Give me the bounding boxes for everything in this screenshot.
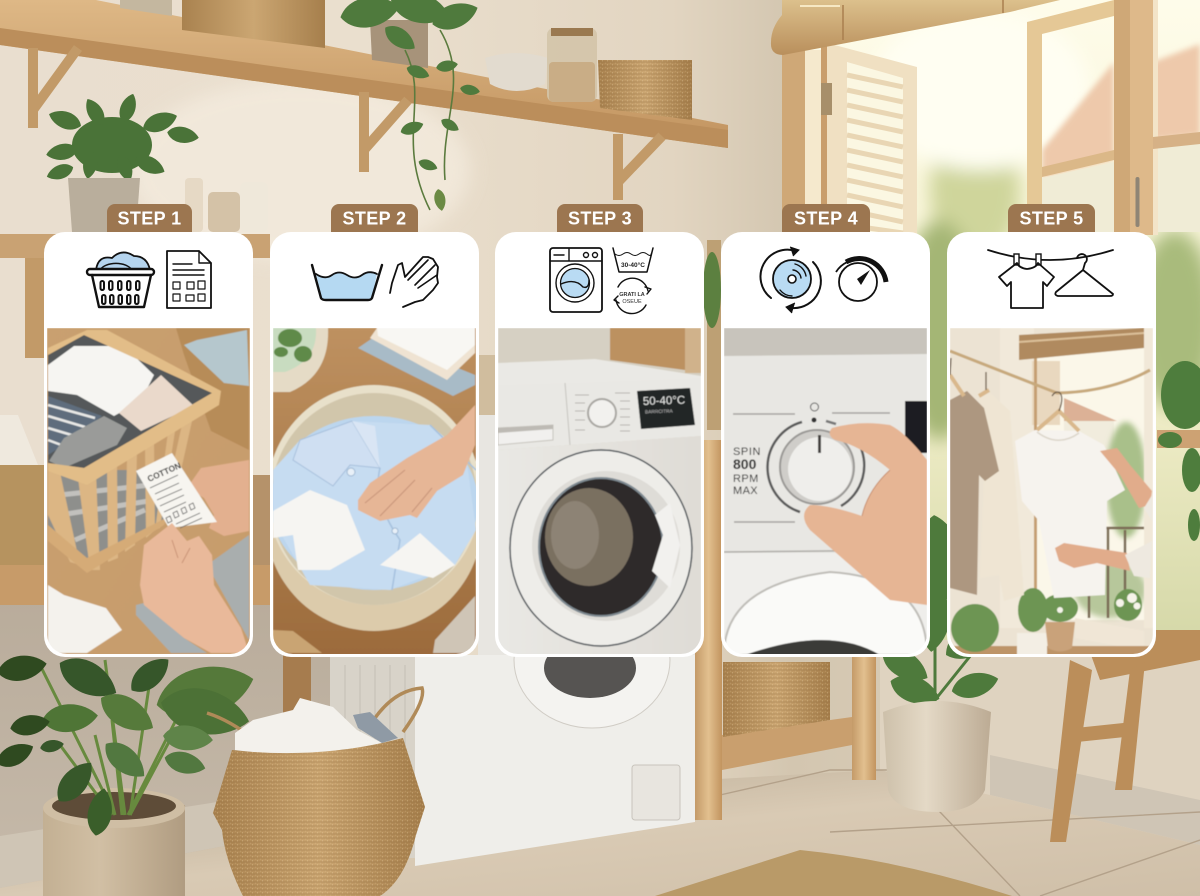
hand behind tag [187, 460, 249, 536]
photo: sorting clothes [47, 328, 250, 655]
pot on shelf [370, 20, 428, 68]
step 4 tab [782, 204, 870, 232]
terracotta-beige pot [43, 788, 185, 896]
brackets [33, 48, 662, 200]
card 2 [270, 232, 479, 657]
towels bottom [48, 585, 122, 653]
wicker basket floor [207, 688, 425, 896]
icon: clothesline shirt [988, 250, 1113, 308]
care tag: COTTON [146, 460, 182, 484]
display: BARRCITRA [645, 409, 674, 415]
hands [1100, 448, 1152, 508]
spin label [733, 446, 761, 497]
hangers [950, 375, 1079, 431]
top shelf [0, 0, 728, 200]
icon: wash basin [312, 265, 382, 300]
blind [1019, 328, 1144, 360]
control panel [498, 400, 701, 450]
basin [273, 526, 476, 632]
plants [951, 588, 1142, 652]
icon: temperature tub: 30-40°C [621, 261, 645, 269]
floor [0, 770, 1200, 896]
step 3 tab [557, 204, 643, 232]
hanging clothes [979, 393, 1024, 601]
detergent drawer [498, 425, 553, 445]
laundry in basket [235, 698, 382, 755]
card 4 [721, 232, 930, 657]
bowl on shelf [485, 53, 548, 91]
icon: cycle arrows: GRATI LA [619, 292, 645, 298]
photo: drying line [950, 328, 1153, 655]
window [805, 0, 1200, 640]
window view [1034, 348, 1144, 620]
display [637, 388, 695, 429]
icon: speed gauge [836, 259, 886, 301]
step 2 tab [331, 204, 418, 232]
plant in white pot right [876, 513, 1005, 812]
icon: cycle arrows: OSEUE [622, 299, 642, 305]
dial [768, 422, 864, 512]
front hand [140, 523, 249, 653]
icon: hand [390, 257, 438, 307]
machine top [498, 358, 701, 386]
folded towels [358, 335, 475, 396]
washing machine in room [283, 355, 700, 866]
open sash frame [1027, 0, 1200, 235]
white garments [273, 490, 365, 570]
step 5 tab [1008, 204, 1095, 232]
hand and arm [358, 405, 475, 521]
card 3 [495, 232, 704, 657]
step 3 panel [495, 204, 704, 657]
door [510, 450, 692, 646]
back basket [176, 328, 249, 450]
icon: washing machine [550, 248, 602, 312]
clothes line [950, 351, 1150, 393]
baseboards [0, 755, 1200, 888]
step 4 tab: STEP 4 [794, 208, 858, 228]
basket interior [48, 335, 212, 468]
wicker box [723, 662, 830, 737]
clothes [48, 346, 154, 416]
basket on shelf [182, 0, 325, 48]
step 1 panel [44, 204, 253, 657]
window frame right [1144, 328, 1153, 628]
window sill [1075, 618, 1144, 651]
step 5 tab: STEP 5 [1019, 208, 1084, 228]
icon: hanger [1055, 254, 1113, 296]
shutter and blind [771, 0, 1060, 235]
small bowl [273, 328, 328, 392]
knob [588, 399, 616, 427]
icon: laundry basket [87, 252, 154, 307]
spin label: SPIN [733, 446, 761, 458]
basket rim [48, 330, 221, 485]
potted plant and bottles [44, 91, 268, 232]
wicker basket on shelf [598, 60, 692, 120]
icon: care label document [167, 251, 211, 308]
basket lower contents [48, 470, 164, 558]
hand [804, 423, 927, 605]
step 5 panel [947, 204, 1156, 657]
leaves [0, 649, 260, 838]
step 2 panel [266, 204, 482, 657]
icon: cycle arrows [614, 278, 651, 314]
step 1 tab: STEP 1 [117, 208, 182, 228]
photo: washer door [498, 328, 701, 655]
wooden shelving unit [695, 240, 876, 820]
display: 50-40°C [643, 395, 685, 408]
balcony rail [1089, 528, 1144, 618]
icon: spin disc [760, 247, 821, 313]
hanging vine [338, 0, 482, 212]
care tag [136, 453, 217, 528]
basket body [213, 738, 425, 896]
step 2 tab: STEP 2 [342, 208, 407, 228]
rug [655, 850, 1012, 896]
large plant left [0, 649, 260, 896]
spin label: MAX [733, 485, 758, 497]
basket handles [207, 688, 423, 765]
jar on shelf [547, 28, 597, 102]
lower-left shelves [0, 234, 271, 605]
step 4 panel [721, 204, 930, 657]
plant right edge [1158, 361, 1200, 541]
bamboo blind roll [771, 0, 1060, 55]
step 3 tab: STEP 3 [568, 208, 632, 228]
spin label: 800 [733, 456, 757, 472]
machine front [498, 436, 701, 655]
spin label: RPM [733, 473, 759, 485]
basket slats [48, 412, 194, 570]
shirt [273, 421, 476, 590]
step 1 tab [107, 204, 192, 232]
photo: spin dial [724, 328, 927, 655]
stool [1050, 630, 1200, 842]
icon: temperature tub [613, 248, 653, 272]
bottom corner items [433, 596, 475, 653]
card 5 [947, 232, 1156, 657]
card 1 [44, 232, 253, 657]
basket bottom rail [48, 517, 168, 573]
photo: hand washing [266, 328, 482, 655]
stems [40, 660, 180, 815]
